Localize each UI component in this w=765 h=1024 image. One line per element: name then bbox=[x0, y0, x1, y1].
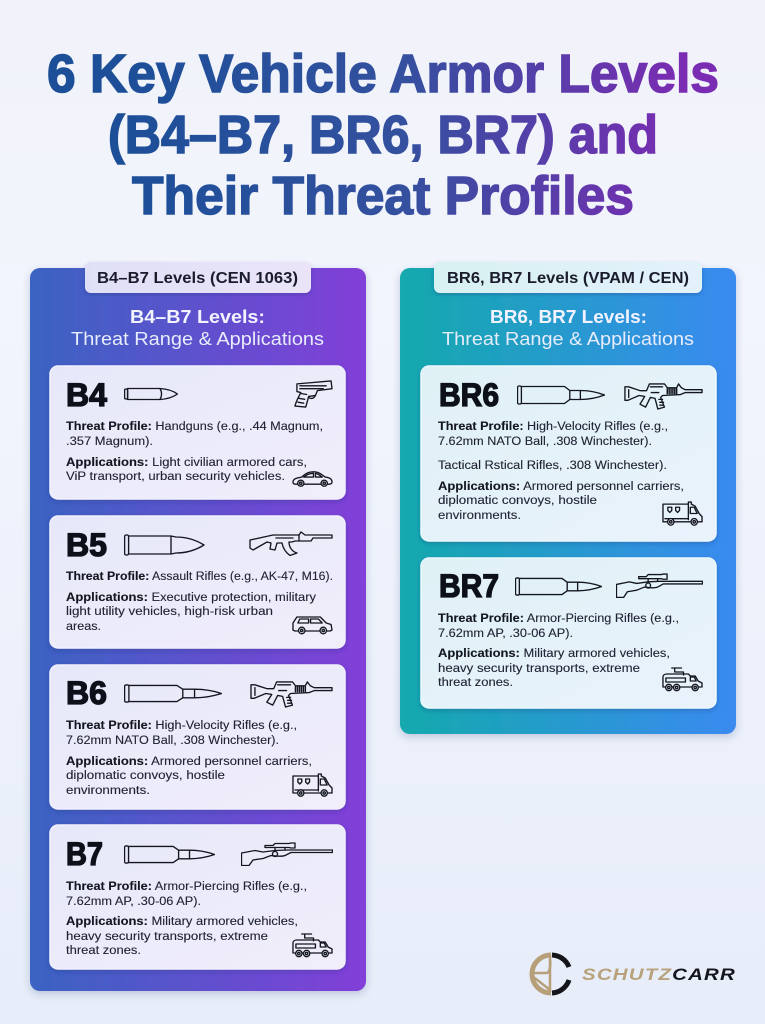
text: BR7 threat and applications: threat zones. bbox=[438, 675, 513, 689]
text: BR7 threat and applications: Threat Profile: Armor-Piercing Rifles (e.g., bbox=[438, 611, 679, 625]
icon: logo emblem bbox=[531, 955, 569, 993]
text: B4 threat and applications: .357 Magnum). bbox=[66, 434, 153, 448]
tab: B4–B7 Levels (CEN 1063): B4–B7 Levels (CEN 1063) bbox=[97, 270, 298, 287]
text: B7 threat and applications bbox=[66, 879, 307, 957]
icon: armor-piercing bullet bbox=[516, 578, 602, 595]
icon: pistol bullet bbox=[125, 388, 177, 400]
text: BR7 threat and applications: 7.62mm AP, .30-06 AP). bbox=[438, 626, 573, 640]
title bbox=[47, 44, 719, 226]
icon: sniper rifle bbox=[242, 843, 332, 866]
wordmark: SCHUTZ CARR bbox=[582, 965, 736, 984]
text: BR7 threat and applications bbox=[438, 611, 679, 689]
panel heading: Threat Range & Applications bbox=[71, 329, 324, 349]
icon: AR rifle bbox=[251, 682, 332, 707]
text: B6 threat and applications: environments. bbox=[66, 783, 150, 797]
text: BR6 threat and applications: Threat Profile: High-Velocity Rifles (e.g., bbox=[438, 419, 668, 433]
panel heading: Threat Range & Applications bbox=[442, 329, 694, 349]
text: B4 threat and applications: Threat Profile: Handguns (e.g., .44 Magnum, bbox=[66, 419, 323, 433]
text: BR6 threat and applications: environments. bbox=[438, 508, 521, 522]
card: B5: B5 bbox=[66, 527, 107, 563]
icon: AK-47 bbox=[250, 532, 332, 556]
text: B7 threat and applications: Applications: Military armored vehicles, bbox=[66, 914, 298, 928]
icon: armored truck bbox=[663, 668, 702, 691]
panel: BR6, BR7 levels bbox=[400, 262, 736, 734]
text: B6 threat and applications bbox=[66, 718, 312, 797]
icon: pistol bbox=[295, 381, 332, 407]
text: BR6 threat and applications bbox=[438, 419, 684, 522]
tab: BR6, BR7 Levels (VPAM / CEN) bbox=[434, 262, 702, 293]
tab: BR6, BR7 Levels (VPAM / CEN): BR6, BR7 Levels (VPAM / CEN) bbox=[447, 270, 689, 287]
icon: SUV bbox=[293, 617, 332, 634]
icon: AR rifle bbox=[625, 384, 702, 409]
text: B5 threat and applications: areas. bbox=[66, 619, 101, 633]
card: BR6: BR6 bbox=[439, 377, 499, 413]
card: B7: B7 bbox=[66, 836, 103, 872]
title: Their Threat Profiles bbox=[132, 166, 634, 226]
icon: sniper rifle bbox=[616, 574, 703, 597]
card: BR7: BR7 bbox=[439, 568, 499, 604]
card: BR7 bbox=[421, 558, 716, 708]
text: B5 threat and applications: Threat Profile: Assault Rifles (e.g., AK-47, M16). bbox=[66, 569, 333, 583]
panel heading: BR6, BR7 Levels: bbox=[490, 307, 647, 327]
icon: armored ambulance bbox=[293, 774, 332, 796]
icon: assault rifle bullet bbox=[125, 535, 204, 555]
text: B5 threat and applications: Applications: Executive protection, military bbox=[66, 590, 317, 604]
text: BR6 threat and applications: 7.62mm NATO Ball, .308 Winchester). bbox=[438, 434, 652, 448]
card: BR6 bbox=[421, 366, 716, 541]
title: 6 Key Vehicle Armor Levels bbox=[47, 44, 719, 104]
text: B7 threat and applications: 7.62mm AP, .30-06 AP). bbox=[66, 894, 201, 908]
text: B4 threat and applications: Applications: Light civilian armored cars, bbox=[66, 455, 307, 469]
text: B6 threat and applications: Threat Profile: High-Velocity Rifles (e.g., bbox=[66, 718, 297, 732]
text: B6 threat and applications: 7.62mm NATO Ball, .308 Winchester). bbox=[66, 733, 279, 747]
card: B6 bbox=[50, 665, 345, 809]
panel heading bbox=[71, 307, 324, 349]
panel: B4–B7 levels bbox=[30, 262, 366, 991]
panel heading bbox=[442, 307, 694, 349]
text: B4 threat and applications bbox=[66, 419, 323, 483]
title: (B4–B7, BR6, BR7) and bbox=[108, 105, 658, 165]
text: B7 threat and applications: threat zones. bbox=[66, 943, 141, 957]
panel heading: B4–B7 Levels: bbox=[130, 307, 265, 327]
text: BR7 threat and applications: heavy security transports, extreme bbox=[438, 661, 640, 675]
icon: car bbox=[293, 472, 332, 486]
card: B4: B4 bbox=[66, 377, 107, 413]
icon: armored ambulance bbox=[663, 502, 702, 525]
card: B4 bbox=[50, 366, 345, 499]
icon: armor-piercing bullet bbox=[125, 846, 215, 863]
text: BR6 threat and applications: diplomatic convoys, hostile bbox=[438, 493, 597, 507]
text: B5 threat and applications bbox=[66, 569, 333, 633]
icon: rifle bullet bbox=[125, 685, 222, 702]
text: BR6 threat and applications: Tactical Rstical Rifles, .308 Winchester). bbox=[438, 458, 667, 472]
text: BR6 threat and applications: Applications: Armored personnel carriers, bbox=[438, 479, 684, 493]
card: B7 bbox=[50, 825, 345, 969]
icon: rifle bullet bbox=[518, 386, 605, 404]
text: B4 threat and applications: ViP transport, urban security vehicles. bbox=[66, 469, 285, 483]
text: B6 threat and applications: diplomatic convoys, hostile bbox=[66, 768, 225, 782]
card: B5 bbox=[50, 516, 345, 648]
logo: SchutzCarr bbox=[531, 955, 736, 993]
text: B6 threat and applications: Applications: Armored personnel carriers, bbox=[66, 754, 312, 768]
icon: armored truck bbox=[293, 934, 332, 957]
text: B7 threat and applications: Threat Profile: Armor-Piercing Rifles (e.g., bbox=[66, 879, 307, 893]
card: B6: B6 bbox=[66, 675, 107, 711]
text: BR7 threat and applications: Applications: Military armored vehicles, bbox=[438, 646, 670, 660]
tab: B4–B7 Levels (CEN 1063) bbox=[85, 262, 311, 293]
text: B5 threat and applications: light utility vehicles, high-risk urban bbox=[66, 604, 273, 618]
text: B7 threat and applications: heavy security transports, extreme bbox=[66, 929, 268, 943]
